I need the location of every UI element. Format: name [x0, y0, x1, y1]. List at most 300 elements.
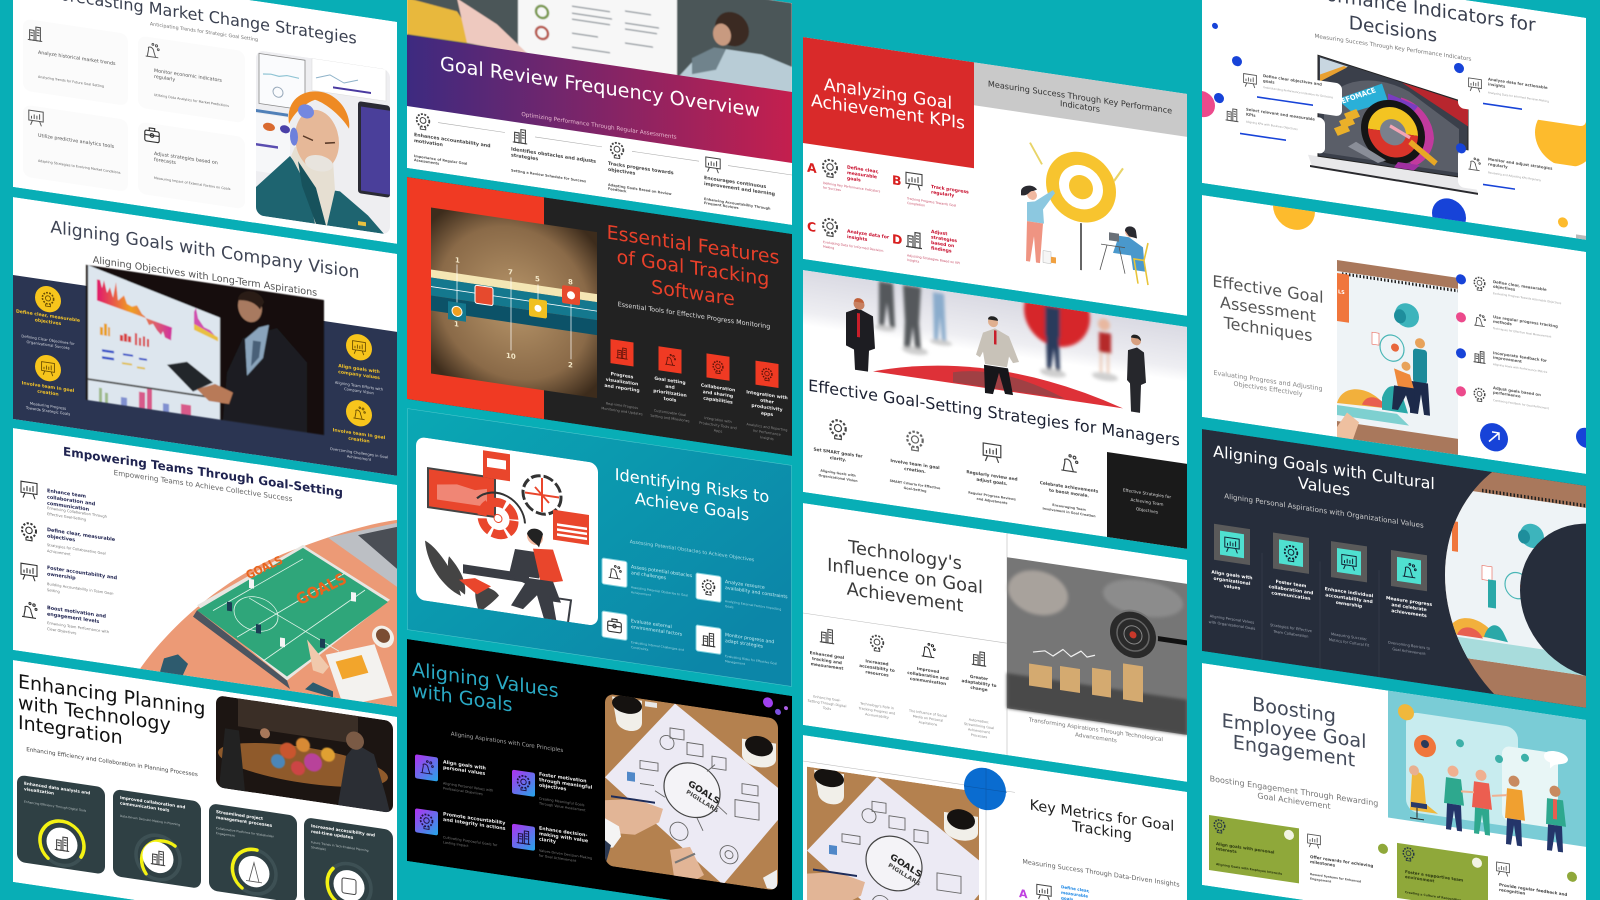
- card: adjust strategies: Measuring Impact of External Factors on Goals: [154, 176, 231, 191]
- KPI B: B: [892, 172, 902, 189]
- title: Employee Goal: [1222, 709, 1366, 753]
- item: enhance team collaboration: collaboration and: [47, 494, 96, 508]
- image: Goals Pillars sketch on desk: GOALS: [888, 853, 923, 880]
- feature: integration: productivity: [751, 403, 783, 413]
- item: define measurable objectives: Define clear, measurable: [1493, 279, 1547, 292]
- item: boost motivation: Boost motivation and: [47, 605, 107, 620]
- card: predictive tools: [23, 104, 128, 192]
- influence: collaboration: Media on Personal: [913, 714, 943, 723]
- value: align goals: Aligning Personal Values: [1210, 614, 1254, 625]
- title: of Goal Tracking: [617, 245, 769, 291]
- arrow button: [1480, 421, 1508, 453]
- title: Values: [1298, 473, 1350, 500]
- influence: collaboration: The Influence of Social: [908, 709, 947, 718]
- item: foster motivation: Creating Meaningful Goals: [539, 797, 585, 807]
- image: team around flower model: [216, 695, 393, 813]
- right item 2: creation: [348, 436, 370, 445]
- image: miniature business people: [803, 243, 1187, 423]
- KPI C: insights: [847, 234, 868, 243]
- item: feedback: improvement: [1493, 355, 1522, 364]
- item: enhances accountability: Enhances accountability and: [414, 132, 491, 149]
- card: streamlined project management: Engagement: [216, 831, 236, 838]
- card: select KPIs: Aligning KPIs with Business Objectives: [1246, 120, 1298, 131]
- card: define objectives: Understanding Performance Indicators for Decisions: [1263, 85, 1334, 99]
- item: boost motivation: Clear Objectives: [47, 627, 77, 635]
- item: define measurable objectives: Evaluating Progress Towards Actionable Objectives: [1493, 291, 1562, 305]
- title: with Goals: [412, 679, 513, 717]
- feature: collaboration: Integration with: [704, 416, 732, 424]
- influence: tracking: Enhanced goal: [810, 650, 845, 660]
- item: define objectives: Define clear, measurable: [47, 527, 116, 543]
- item: define objectives: Achievement: [47, 549, 71, 557]
- image: Goals Pillars sketch on desk: PIGILLARS: [685, 789, 719, 815]
- value: enhance accountability: ownership: [1336, 600, 1363, 610]
- subtitle: Optimizing Performance Through Regular Assessments: [521, 112, 677, 141]
- blue half circle: [1576, 426, 1596, 449]
- card: foster supportive environment: Foster a supportive team: [1405, 869, 1463, 883]
- influence: tracking: Tools: [822, 706, 831, 711]
- slide: Key Metrics for Goal Tracking: [803, 735, 1187, 900]
- right item 1: Aligning Team Efforts with: [335, 381, 384, 392]
- red title block: [803, 37, 974, 168]
- card: regular feedback: [1497, 861, 1577, 900]
- image: timeline on wood: 5: [535, 274, 540, 284]
- influence: adaptability: [962, 649, 997, 741]
- item: assess obstacles: and challenges: [631, 570, 667, 581]
- item: define objectives: Strategies for Collaborative Goal: [47, 543, 106, 556]
- subtitle: Measuring Success Through Data-Driven Insights: [1022, 858, 1180, 889]
- item: monitor progress: [696, 625, 777, 671]
- item: identifies obstacles: [511, 128, 602, 186]
- red panel: [407, 177, 544, 419]
- title: Influence on Goal: [827, 555, 983, 599]
- left item 2: Towards Strategic Goals: [25, 406, 70, 416]
- feature: progress visualization: visualization: [606, 377, 638, 388]
- black callout box: Objectives: [1136, 506, 1158, 515]
- right item 1: [335, 331, 384, 397]
- card: offer rewards: Engagement: [1310, 877, 1332, 884]
- right item 2: Overcoming Challenges in Goal: [330, 447, 388, 460]
- KPI A: measurable: [847, 170, 877, 180]
- influence: tracking: Setting Through Digital: [808, 699, 846, 708]
- strategy 4: Involvement in Goal Creation: [1042, 506, 1096, 518]
- item: tracks progress: Tracks progress towards: [608, 161, 674, 176]
- influence: collaboration: [907, 640, 949, 729]
- item: evaluate factors: Evaluate external: [631, 618, 672, 630]
- item: enhances accountability: [414, 113, 505, 176]
- item: foster motivation: [512, 768, 593, 813]
- image: timeline on wood: 1: [454, 319, 459, 329]
- KPI D: Insights: [907, 258, 920, 264]
- subtitle: Indicators: [1060, 98, 1100, 114]
- card: increased accessibility: Future Trends in Tech-Enabled Planning: [311, 840, 369, 853]
- image: man with tablet and charts: [86, 265, 324, 435]
- strategy 4: Encouraging Team: [1052, 503, 1086, 512]
- feature: collaboration: Collaboration: [701, 383, 735, 394]
- left item 1: Organizational Success: [26, 340, 70, 350]
- KPI C: Making: [823, 244, 834, 250]
- card: regular feedback: Provide regular feedback and: [1499, 882, 1567, 897]
- influence: accessibility: accessibility to: [859, 663, 895, 673]
- influence: adaptability: Automation:: [969, 718, 989, 725]
- feature: integration: for Performance: [753, 429, 781, 437]
- feature: collaboration: Productivity Tools and: [699, 421, 737, 430]
- item: foster motivation: Through Value Assessment: [538, 801, 586, 813]
- subtitle: Enhancing Efficiency and Collaboration in Planning Processes: [26, 747, 198, 778]
- title: Software: [651, 275, 735, 311]
- item: enhance team collaboration: communication: [47, 501, 90, 513]
- feature: progress visualization: Progress: [611, 371, 634, 381]
- influence: accessibility: Technology's Role in: [859, 701, 894, 710]
- item: identifies obstacles: Setting a Review Schedule for Success: [511, 168, 586, 183]
- decorative shapes: [1189, 19, 1595, 254]
- illustration: people at target: [1021, 141, 1148, 285]
- title: Effective Goal: [1212, 272, 1324, 307]
- feature: collaboration: Apps: [714, 428, 722, 434]
- influence: collaboration: Aspirations: [919, 720, 938, 727]
- item: monitor progress: Monitor progress and: [725, 632, 774, 645]
- KPI A: for Success: [823, 185, 841, 192]
- item: align goals: personal values: [443, 765, 485, 777]
- image: Goals Pillars sketch on desk: [807, 766, 980, 900]
- left item 1: Define clear, measurable: [16, 308, 80, 324]
- card: monitor indicators: Monitor economic indicators: [154, 68, 222, 84]
- left item 1: [16, 281, 80, 352]
- title: Analyzing Goal: [824, 75, 952, 114]
- card: streamlined project management: Collaborative Platforms for Stakeholder: [216, 826, 275, 839]
- title: Aligning Values: [412, 658, 559, 702]
- item: promote accountability: and integrity in actions: [443, 817, 506, 832]
- title: Assessment: [1220, 293, 1316, 326]
- illustration: risk analysis worker: [416, 436, 598, 634]
- grey header band: [974, 62, 1187, 137]
- title: Technology's: [847, 537, 962, 574]
- KPI D: findings: [931, 245, 952, 255]
- item: encourages improvement: Frequent Reviews: [704, 201, 739, 210]
- navy band: [13, 275, 397, 476]
- card: analyze trends: Analyze historical market trends: [38, 50, 116, 67]
- item: analyze resources: [696, 573, 788, 617]
- card: align goals with interests: [1209, 815, 1299, 883]
- slide: Analyzing Goal Achievement KPIs: [803, 37, 1187, 316]
- feature: integration: apps: [761, 411, 773, 418]
- item: promote accountability: Promote accountability: [443, 811, 506, 827]
- feature: goal setting: [650, 345, 690, 423]
- strategy 3: Regular Progress Reviews: [968, 490, 1016, 502]
- feature: progress visualization: Real-time Progress: [606, 401, 638, 410]
- card: monitor strategies: regularly: [1488, 161, 1508, 169]
- strategy 1: Organizational Vision: [818, 473, 858, 483]
- value: enhance accountability: accountability and: [1325, 592, 1373, 605]
- strategy 2: Goal-Setting: [904, 486, 927, 493]
- card: offer rewards: Offer rewards for achieving: [1310, 854, 1373, 868]
- KPI D: D: [892, 231, 902, 248]
- item: enhance decision-making: Enhance decision-: [539, 826, 587, 839]
- card: analyze trends: [23, 18, 128, 106]
- image: soccer pitch on desk: GOALS: [293, 569, 350, 609]
- strategy 2: SMART Criteria for Effective: [890, 479, 941, 490]
- strategy 4: [1040, 450, 1099, 519]
- item: feedback: Aligning Goals with Performance Metrics: [1493, 362, 1548, 374]
- card: streamlined project management: [209, 803, 297, 900]
- right item 2: Achievement: [347, 454, 372, 462]
- subtitle: Aligning Objectives with Long-Term Aspirations: [93, 255, 317, 299]
- slide: Forecasting Market Change Strategies: [13, 0, 397, 244]
- card: increased accessibility: real-time updates: [311, 829, 354, 840]
- value: foster collaboration: Foster team: [1276, 579, 1307, 589]
- strategy 1: Aligning Goals with: [820, 469, 856, 478]
- value: align goals: with Organizational Goals: [1209, 620, 1255, 631]
- right item 1: Align goals with: [338, 363, 380, 375]
- influence: accessibility: [858, 633, 895, 721]
- influence: tracking: tracking and: [812, 656, 842, 665]
- KPI A: A: [807, 160, 817, 176]
- black callout box: [1107, 452, 1187, 549]
- item: foster accountability: ownership: [47, 571, 76, 582]
- subtitle: Assessing Potential Obstacles to Achieve Objectives: [630, 539, 755, 563]
- card: predictive tools: Utilize predictive analytics tools: [38, 133, 115, 150]
- item: enhance decision-making: for Goal Achievement: [539, 854, 577, 863]
- influence: accessibility: Tracking Progress and: [858, 706, 895, 716]
- card: streamlined project management: Streamlined project: [216, 809, 263, 821]
- left item 1: objectives: [35, 317, 61, 327]
- KPI D: [892, 223, 960, 270]
- title: Empowering Teams Through Goal-Setting: [63, 444, 343, 500]
- KPI D: Adjust: [931, 229, 948, 237]
- image caption: Transforming Aspirations Through Technological: [1028, 717, 1163, 743]
- item: regular tracking: methods: [1493, 319, 1513, 326]
- item: assess obstacles: Achievement: [631, 590, 652, 597]
- feature: integration: Integration with: [746, 389, 788, 401]
- value: measure progress: achievements: [1391, 608, 1427, 619]
- item: boost motivation: engagement levels: [47, 611, 99, 625]
- card: predictive tools: Adapting Strategies to Evolving Market Conditions: [38, 159, 121, 175]
- slide: Aligning Goals with Company Vision: [13, 197, 397, 476]
- title: Achievement: [847, 579, 963, 617]
- card: define objectives: [1232, 55, 1342, 117]
- item: assess obstacles: [602, 558, 693, 603]
- subtitle: Essential Tools for Effective Progress Monitoring: [618, 300, 770, 331]
- slide: Aligning Values with Goals: [407, 639, 792, 900]
- influence: tracking: measurement: [811, 661, 843, 671]
- card: analyze data: insights: [1488, 81, 1506, 89]
- value: align goals: values: [1224, 583, 1241, 592]
- left item 2: [22, 351, 75, 417]
- card: define objectives: Define clear objectives and: [1263, 73, 1322, 87]
- card: adjust strategies: forecasts: [154, 157, 176, 166]
- image: timeline on wood: 7: [508, 267, 513, 277]
- title: Integration: [18, 711, 123, 749]
- card: enhanced data analysis: Enhancing Efficiency Through Digital Tools: [24, 800, 87, 813]
- title: Achievement KPIs: [811, 91, 965, 134]
- value: foster collaboration: Team Collaboration: [1272, 629, 1309, 639]
- item: enhance decision-making: [512, 822, 592, 865]
- subtitle: Anticipating Trends for Strategic Goal Setting: [150, 21, 258, 43]
- image: timeline on wood: 1: [455, 255, 460, 265]
- image: Goals Pillars sketch on desk: GOALS: [686, 779, 721, 807]
- title: Effective Goal-Setting Strategies for Managers: [808, 376, 1180, 450]
- slide: Identifying Risks to Achieve Goals: [408, 409, 792, 686]
- card: improved collaboration: Data-Driven Decision-Making in Planning: [120, 814, 180, 827]
- right item 2: [330, 396, 388, 465]
- influence: tracking: [808, 626, 846, 713]
- card: enhanced data analysis: [17, 775, 105, 875]
- subtitle: Measuring Success Through Key Performance Indicators: [1315, 34, 1472, 63]
- slide: Enhancing Planning with Technology Integration: [13, 660, 397, 900]
- influence: adaptability: Achievement: [968, 727, 991, 735]
- item: adjust goals: Adjust goals based on: [1493, 385, 1541, 397]
- item: encourages improvement: Enhancing Accountability Through: [704, 197, 771, 211]
- card: enhanced data analysis: visualization: [24, 786, 54, 796]
- item: enhance decision-making: making with value: [539, 831, 588, 844]
- image: Goals Pillars sketch on desk: [605, 692, 778, 893]
- item: foster accountability: Foster accountability and: [47, 565, 118, 581]
- KPI D: Adjusting Strategies Based on KPI: [907, 253, 960, 265]
- title: Techniques: [1223, 313, 1312, 345]
- KPI B: regularly: [931, 189, 954, 199]
- feature: goal setting: and: [665, 384, 675, 391]
- feature: integration: [746, 359, 788, 443]
- strategy 3: [966, 440, 1018, 507]
- strategy 3: adjust goals.: [976, 477, 1008, 487]
- subtitle: Aligning Personal Aspirations with Organizational Values: [1224, 491, 1424, 530]
- card: improved collaboration: Improved collaboration and: [120, 795, 185, 810]
- KPI B: Tracking Progress Towards Goal: [906, 196, 956, 208]
- value: foster collaboration: collaboration and: [1269, 584, 1313, 596]
- value: measure progress: and celebrate: [1391, 602, 1427, 613]
- image caption: Advancements: [1075, 732, 1117, 744]
- subtitle: Empowering Teams to Achieve Collective Success: [114, 468, 293, 503]
- image: Goals Pillars sketch on desk: PIGILLARS: [887, 862, 921, 888]
- item: analyze resources: Analyze resource: [725, 579, 765, 591]
- feature: goal setting: Customizable Goal: [654, 409, 686, 417]
- title: Essential Features: [607, 221, 779, 269]
- value: measure progress: Measure progress: [1386, 595, 1432, 608]
- title: Decisions: [1349, 13, 1437, 47]
- item: monitor progress: Evaluating Risks for Effective Goal: [725, 654, 777, 666]
- item: evaluate factors: [602, 611, 684, 657]
- KPI B: Track progress: [931, 184, 969, 196]
- strategy 3: and Adjustments: [977, 497, 1008, 505]
- image: wooden blocks and magnifier: [1007, 557, 1187, 735]
- circular calendar image: [1442, 465, 1586, 708]
- item: assess obstacles: Assessing Potential Obstacles to Goal: [631, 585, 688, 598]
- item: analyze resources: Analyzing External Factors Impacting: [725, 599, 781, 611]
- slide: Boosting Employee Goal Engagement: [1202, 663, 1586, 900]
- right item 1: company values: [338, 369, 380, 381]
- feature: integration: Insights: [760, 435, 774, 441]
- influence: collaboration: communication: [910, 676, 946, 686]
- slide: Empowering Teams Through Goal-Setting: [13, 428, 397, 714]
- KPI A: [807, 157, 881, 198]
- item: analyze resources: availability and constraints: [725, 585, 788, 600]
- item: encourages improvement: Encourages continuous: [704, 175, 766, 190]
- item: regular tracking: Techniques for Effective Goal Measurement: [1492, 326, 1551, 339]
- image: calendar illustration: LS: [1338, 289, 1345, 296]
- item: enhances accountability: Importance of Regular Goal: [414, 154, 467, 166]
- item: regular tracking: [1456, 309, 1558, 340]
- item: foster motivation: through meaningful: [539, 777, 593, 791]
- item: define measurable objectives: objectives: [1493, 284, 1516, 292]
- item: enhance decision-making: Values-Driven Decision-Making: [539, 849, 592, 860]
- item: monitor progress: adapt strategies: [725, 638, 764, 650]
- influence: tracking: Enhancing Goal-: [813, 695, 841, 703]
- item: tracks progress: [608, 142, 699, 204]
- item: foster accountability: [21, 561, 118, 602]
- metric A: measurable: [1061, 890, 1088, 899]
- value: measure progress: Goal Achievement: [1392, 647, 1426, 656]
- influence: adaptability: adaptability to: [962, 678, 997, 688]
- item: foster accountability: Building Accountability in Team Goal-: [47, 582, 115, 596]
- card: monitor indicators: Utilizing Data Analytics for Market Predictions: [154, 93, 229, 108]
- item: promote accountability: [415, 807, 506, 854]
- influence: collaboration: collaboration and: [907, 670, 949, 681]
- card: select KPIs: KPIs: [1246, 112, 1256, 118]
- strategy 2: [890, 428, 941, 495]
- feature: progress visualization: Monitoring and Updates: [601, 406, 643, 416]
- card: analyze data: [1454, 62, 1586, 127]
- influence: accessibility: Accountability: [865, 712, 889, 720]
- left item 2: Involve team in goal: [22, 380, 75, 394]
- item: foster motivation: Foster motivation: [539, 772, 587, 785]
- strategy 1: clarity.: [830, 455, 847, 463]
- card: analyze data: Analyzing Data for Informed Decision-Making: [1488, 90, 1549, 103]
- feature: collaboration: [699, 352, 737, 436]
- left item 2: creation: [37, 389, 59, 398]
- item: enhance team collaboration: [21, 481, 107, 525]
- item: align goals: Align goals with: [443, 759, 487, 772]
- item: define objectives: [22, 522, 116, 563]
- card: analyze trends: Analyzing Trends for Future Goal Setting: [38, 75, 104, 88]
- item: feedback: Incorporate feedback for: [1493, 350, 1547, 363]
- subtitle: Evaluating Progress and Adjusting: [1213, 369, 1323, 393]
- feature: integration: other: [760, 398, 775, 406]
- KPI C: C: [807, 219, 816, 235]
- card: monitor indicators: [138, 36, 245, 123]
- item: boost motivation: Enhancing Team Performance with: [47, 621, 109, 634]
- item: define objectives: objectives: [47, 533, 75, 543]
- card: monitor strategies: Monitor and adjust strategies: [1488, 156, 1553, 171]
- title: Tracking: [1071, 819, 1132, 844]
- image: timeline on wood: 2: [568, 360, 573, 370]
- card: increased accessibility: Strategies: [311, 845, 326, 851]
- title band: [407, 35, 792, 163]
- value: enhance accountability: Measuring Success:: [1331, 632, 1367, 641]
- influence: adaptability: Streamlining Goal: [964, 722, 994, 730]
- card: monitor indicators: regularly: [154, 74, 175, 83]
- value: align goals: [1209, 523, 1255, 631]
- card: offer rewards: [1308, 833, 1388, 892]
- image: calendar illustration: [1337, 260, 1458, 455]
- slide: Goal Review Frequency Overview: [407, 0, 792, 225]
- card: foster supportive environment: environment: [1405, 874, 1434, 883]
- item: encourages improvement: [704, 157, 792, 218]
- yellow half circle: [1273, 185, 1315, 233]
- slide: Key Performance Indicators for Decisions: [1189, 0, 1595, 254]
- value: measure progress: [1386, 549, 1432, 657]
- KPI B: Completion: [907, 201, 925, 208]
- strategy 1: Set SMART goals for: [813, 447, 863, 460]
- influence: accessibility: resources: [865, 669, 889, 678]
- item: evaluate factors: environmental factors: [631, 624, 683, 638]
- subtitle: Measuring Success Through Key Performance: [988, 78, 1172, 116]
- title: Key Metrics for Goal: [1030, 798, 1174, 835]
- subtitle: Boosting Engagement Through Rewarding: [1210, 774, 1378, 808]
- KPI D: based on: [931, 240, 954, 249]
- item: align goals: [415, 754, 493, 798]
- subtitle: Aligning Aspirations with Core Principles: [451, 731, 563, 754]
- feature: collaboration: and sharing: [703, 389, 733, 400]
